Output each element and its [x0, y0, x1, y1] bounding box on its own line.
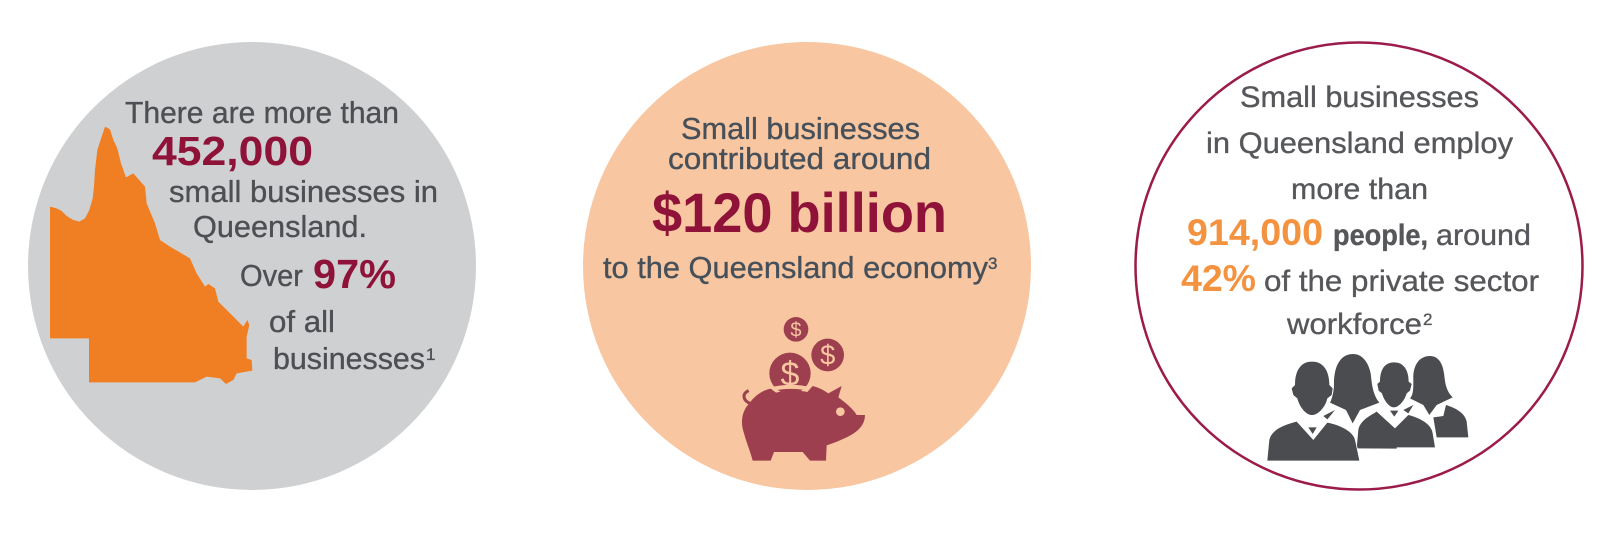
- icon: piggy bank with coins: $: [820, 340, 835, 371]
- text: contributed around: contributed around: [668, 141, 931, 176]
- text: more than: more than: [1291, 173, 1428, 206]
- outlined circle: [1136, 42, 1582, 490]
- stat: $120 billion: $120 billion: [652, 181, 947, 244]
- peach circle background: [583, 42, 1031, 490]
- icon: piggy bank with coins: [742, 317, 865, 461]
- footnote marker 2: 2: [1423, 310, 1432, 329]
- text: Queensland: Queensland.: [193, 209, 367, 244]
- text: in Queensland employ: in Queensland employ: [1206, 127, 1513, 160]
- footnote marker 3: 3: [988, 254, 997, 273]
- grey circle background: [28, 42, 476, 490]
- text: workforce: workforce: [1286, 308, 1422, 341]
- panel: economic contribution: [583, 42, 1031, 490]
- icon: Queensland map: [50, 127, 252, 384]
- icon: group of people: [1267, 354, 1468, 461]
- text: to the Queensland economy: to the Queensland economy: [603, 250, 988, 285]
- panel: number of small businesses: [28, 42, 476, 490]
- icon: piggy bank with coins: $: [790, 320, 802, 342]
- text: small businesses: Small businesses: [1240, 81, 1479, 114]
- text: of the private sector: of the private sector: [1264, 265, 1539, 298]
- text: small businesses: Small businesses: [681, 111, 920, 146]
- stat: 42%: 42%: [1181, 258, 1256, 299]
- panel: employment: [1136, 42, 1582, 490]
- stat: 97%: 97%: [313, 251, 396, 297]
- footnote marker 1: 1: [426, 345, 435, 364]
- text: over: Over: [240, 258, 303, 293]
- text: around: around: [1436, 219, 1531, 252]
- stat: 914,000: 914,000: [1187, 212, 1323, 253]
- text: there are more than: There are more than: [125, 95, 399, 130]
- text: of all: of all: [269, 304, 335, 339]
- text: small businesses in: small businesses in: [169, 174, 438, 209]
- stat: 452,000: 452,000: [152, 128, 313, 174]
- text: businesses: businesses: [273, 341, 425, 376]
- text: people: people,: [1333, 219, 1428, 252]
- icon: piggy bank with coins: $: [781, 356, 800, 394]
